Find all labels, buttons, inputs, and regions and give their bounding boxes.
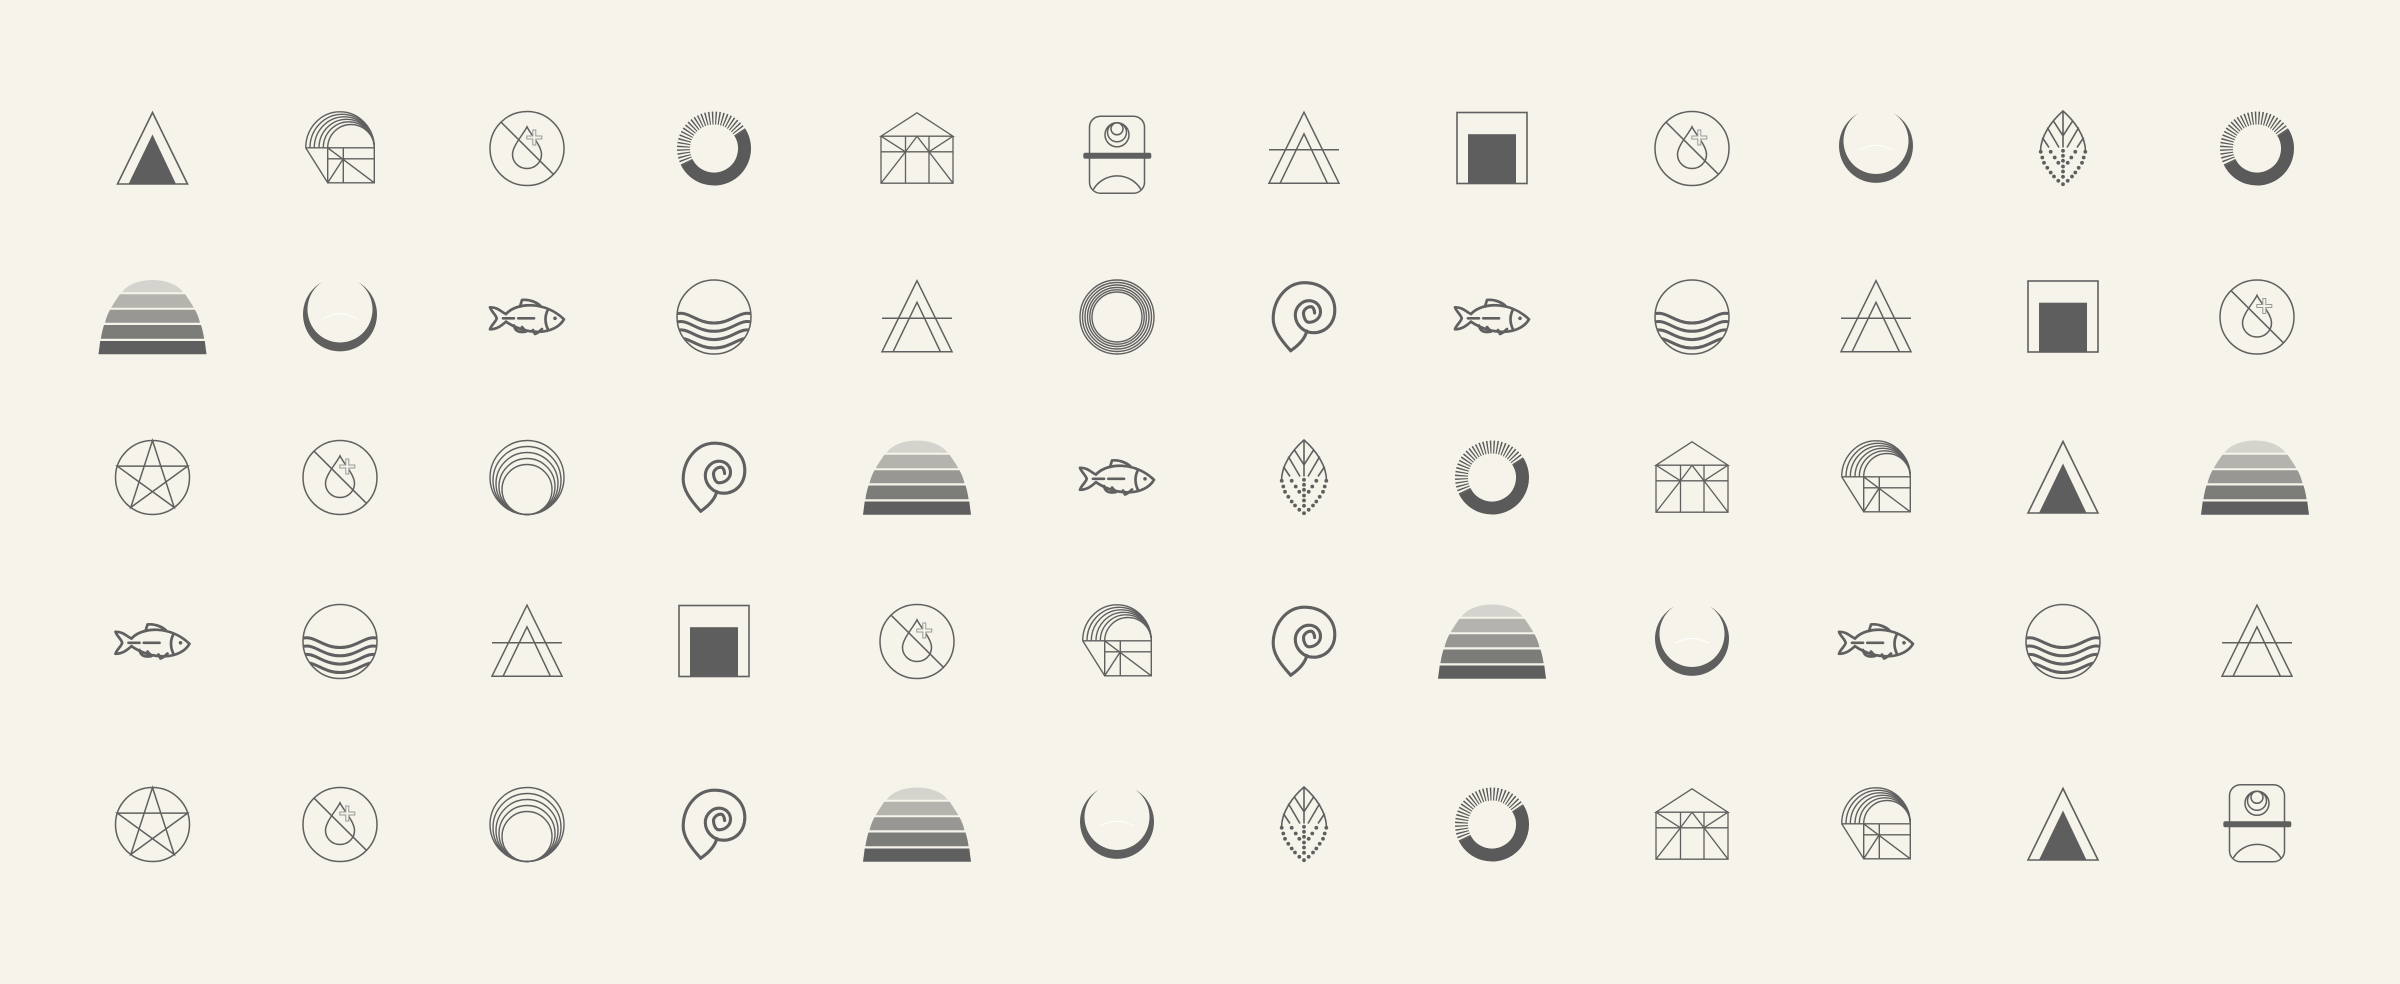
icon: nested rings (490, 788, 564, 862)
icon: shell tag (2223, 785, 2291, 862)
icon: dome (863, 788, 971, 862)
icon: triangle (2028, 788, 2098, 860)
icon: crescent (1080, 790, 1154, 859)
icon: square (679, 606, 749, 676)
icon: crossed-out drop (303, 440, 377, 514)
icon: fish (490, 300, 564, 334)
icon: waves (1654, 280, 1730, 354)
icon: greenhouse (1656, 789, 1728, 859)
icon: triangle (2028, 442, 2098, 513)
icon: dome (863, 440, 971, 515)
icon: nested rings (490, 440, 564, 514)
icon: sun ring (684, 118, 745, 179)
icon: arch house (1083, 605, 1151, 676)
icon: nautilus (1273, 283, 1335, 351)
icon: dome (1438, 604, 1546, 679)
icon: alchemy triangle (492, 605, 562, 676)
icon: crossed-out drop (1655, 112, 1729, 186)
icon: leaf (1280, 440, 1328, 515)
icon: alchemy triangle (882, 281, 952, 352)
icon: crossed-out drop (880, 604, 954, 678)
icon: dome (98, 280, 206, 354)
icon: concentric rings (1080, 280, 1154, 354)
icon: crescent (1839, 114, 1913, 183)
icon: dome (2201, 440, 2309, 515)
icon: shell tag (1083, 116, 1151, 193)
icon: crossed-out drop (303, 788, 377, 862)
icon: nautilus (683, 790, 745, 858)
icon: fish (1080, 460, 1154, 494)
icon: square (2028, 281, 2098, 352)
icon: alchemy triangle (2222, 605, 2292, 676)
icon: pentagram (116, 788, 190, 862)
icon: waves (302, 604, 378, 678)
icon: leaf (2039, 111, 2087, 186)
icon: leaf (1280, 787, 1328, 862)
icon: fish (1839, 624, 1913, 658)
icon: sun ring (2227, 118, 2288, 179)
icon: arch house (306, 112, 374, 183)
icon: nautilus (683, 443, 745, 511)
icon: nautilus (1273, 607, 1335, 675)
icon: fish (1455, 300, 1529, 334)
icon: arch house (1842, 788, 1910, 859)
icon: crescent (1655, 606, 1729, 676)
icon: crossed-out drop (490, 112, 564, 186)
icon: sun ring (1462, 794, 1523, 855)
icon: greenhouse (1656, 442, 1728, 512)
icon: triangle (118, 112, 188, 184)
icon: waves (2025, 604, 2101, 678)
icon: arch house (1842, 441, 1910, 512)
icon: alchemy triangle (1269, 112, 1339, 183)
icon: pentagram (116, 440, 190, 514)
icon: crossed-out drop (2220, 280, 2294, 354)
icon: waves (676, 280, 752, 354)
icon: crescent (303, 282, 377, 351)
icon: greenhouse (881, 113, 953, 183)
icon: alchemy triangle (1841, 281, 1911, 352)
icon: square (1457, 112, 1527, 184)
icon: fish (116, 624, 190, 658)
icon: sun ring (1462, 447, 1523, 508)
